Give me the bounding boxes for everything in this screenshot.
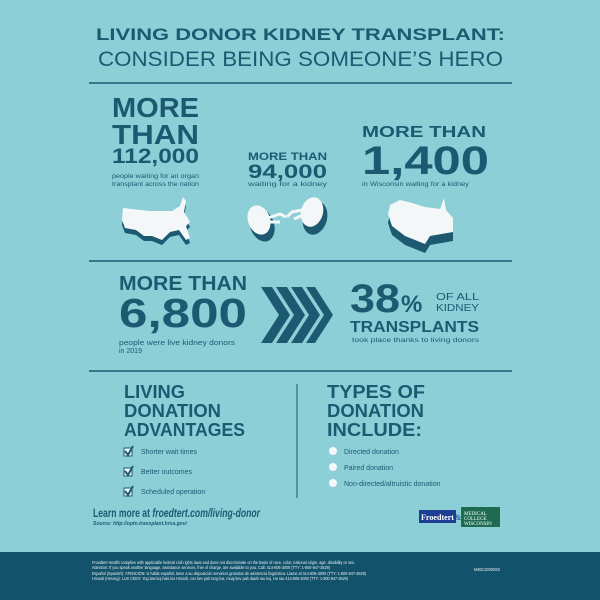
icon: kidneys	[244, 195, 331, 245]
stat: 1,400 Wisconsin	[362, 124, 489, 188]
icon: Wisconsin map	[388, 198, 453, 253]
panel: types of donation: INCLUDE:	[327, 420, 422, 440]
logo: &	[455, 513, 462, 522]
icon: US map	[122, 197, 190, 245]
stat: 112,000 nationwide: THAN	[112, 119, 199, 150]
stat: 112,000 nationwide: people waiting for an organ	[112, 173, 199, 180]
stat: 6,800 donors: MORE THAN	[119, 273, 247, 295]
stat: 1,400 Wisconsin: in Wisconsin waiting for a kidney	[362, 181, 470, 188]
stat: 94,000 kidney: waiting for a kidney	[247, 181, 328, 188]
footer: Attention: If you speak another language, assistance services, free of charge, are available to you. Call: 414-805-3000 (TTY: 1-800-947-3529)	[92, 565, 330, 570]
title	[96, 25, 505, 71]
learn more link: Source: http://optn.transplant.hrsa.gov/	[93, 521, 188, 527]
stat: 38% transplants: OF ALL	[436, 292, 480, 303]
stat: 6,800 donors: 6,800	[119, 290, 247, 336]
learn more link: Learn more at froedtert.com/living-donor	[93, 506, 261, 520]
stat: 112,000 nationwide: MORE	[112, 92, 199, 123]
stat: 38% transplants: %	[401, 291, 422, 318]
stat: 6,800 donors: people were live kidney donors	[119, 340, 236, 347]
stat: 6,800 donors	[119, 273, 247, 355]
panel: living donation advantages: DONATION	[124, 401, 221, 421]
panel: living donation advantages: Shorter wait times	[141, 449, 198, 456]
panel: living donation advantages: Better outcomes	[141, 469, 192, 476]
logo: Froedtert	[421, 513, 454, 522]
icon: checkbox	[124, 466, 133, 476]
stat: 112,000 nationwide: 112,000	[112, 145, 199, 168]
panel: types of donation	[327, 382, 441, 488]
panel: living donation advantages	[124, 382, 245, 496]
stat: 6,800 donors: in 2019	[119, 348, 142, 355]
stat: 1,400 Wisconsin: MORE THAN	[362, 124, 486, 141]
icon: checkbox	[124, 446, 133, 456]
panel: types of donation: DONATION	[327, 401, 424, 421]
panel: types of donation: Paired donation	[344, 465, 393, 472]
stat: 112,000 nationwide	[112, 92, 199, 188]
title: CONSIDER BEING SOMEONE’S HERO	[98, 48, 503, 71]
logo: WISCONSIN	[464, 522, 492, 527]
stat: 38% transplants: 38	[350, 277, 400, 321]
stat: 38% transplants: took place thanks to living donors	[352, 337, 480, 344]
logo: COLLEGE	[464, 517, 487, 522]
title: LIVING DONOR KIDNEY TRANSPLANT:	[96, 25, 505, 44]
panel: living donation advantages: ADVANTAGES	[124, 420, 245, 440]
footer: Hmoob (Hmong): LUS CEEV: Yog tias koj hais lus Hmoob, cov kev pab txog lus, muaj kev pab dawb rau koj. Hu rau 414-805-3000 (TTY: 1-800-947-3529)	[92, 576, 348, 581]
footer: Español (Spanish): ATENCIÓN: si habla español, tiene a su disposición servicios gratuitos de asistencia lingüística. Llame al 414-805-3000 (TTY: 1-800-947-3529)	[92, 571, 367, 576]
stat: 112,000 nationwide: transplant across the nation	[112, 181, 199, 188]
stat: 38% transplants: TRANSPLANTS	[350, 319, 479, 336]
panel: living donation advantages: Scheduled operation	[141, 489, 205, 496]
icon: checkbox	[124, 486, 133, 496]
stat: 94,000 kidney: MORE THAN	[248, 151, 327, 163]
panel: living donation advantages: LIVING	[124, 382, 185, 402]
panel: types of donation: Directed donation	[344, 449, 399, 456]
footer: Froedtert Health complies with applicable federal civil rights laws and does not discriminate on the basis of race, color, national origin, age, disability or sex.	[92, 560, 355, 565]
stat: 94,000 kidney	[247, 151, 328, 188]
footer	[0, 552, 600, 600]
stat: 1,400 Wisconsin: 1,400	[362, 139, 489, 183]
stat: 94,000 kidney: 94,000	[248, 162, 327, 183]
logo	[419, 507, 500, 527]
stat: 38% transplants	[350, 277, 480, 344]
icon: chevron arrows	[261, 287, 333, 343]
footer: MKE3209282	[474, 567, 501, 572]
panel: types of donation: TYPES OF	[327, 382, 425, 402]
logo: MEDICAL	[464, 512, 487, 517]
stat: 38% transplants: KIDNEY	[436, 303, 479, 314]
panel: types of donation: Non-directed/altruistic donation	[344, 481, 441, 488]
learn more link	[93, 506, 261, 527]
